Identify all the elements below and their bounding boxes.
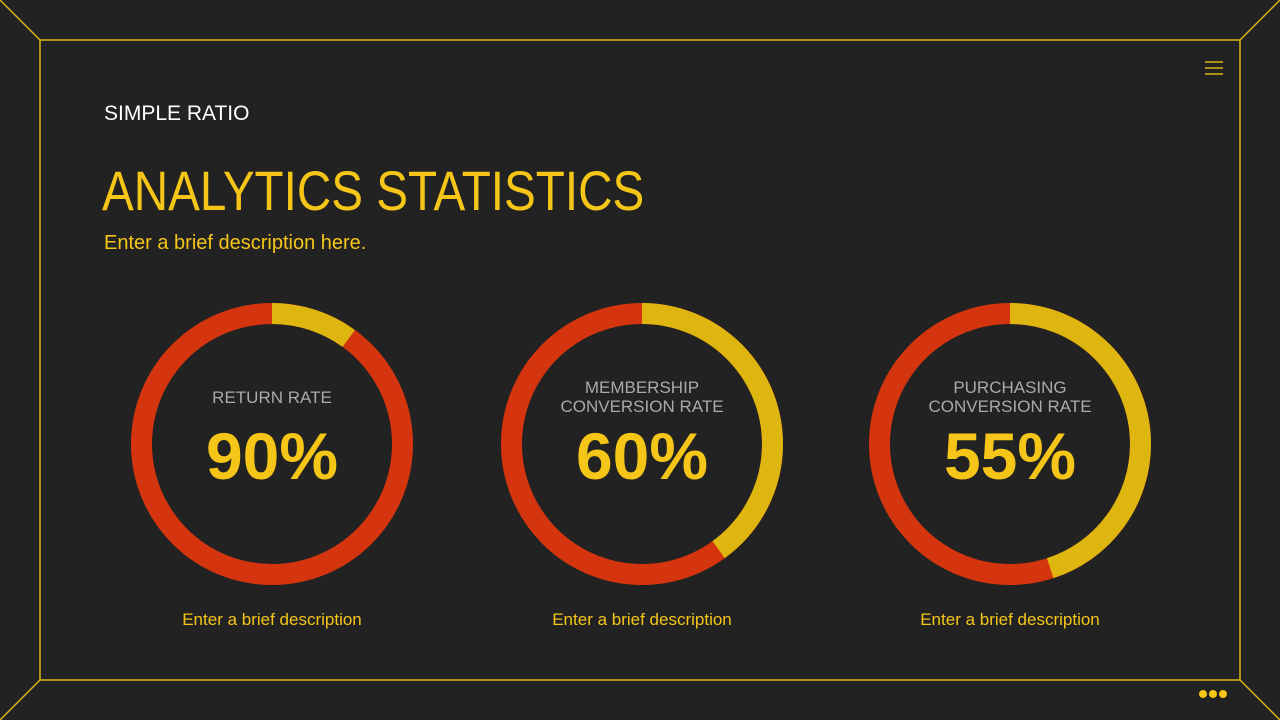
donut: membership: 60% xyxy=(576,419,708,493)
donut: return rate: Enter a brief description xyxy=(182,610,362,629)
donut: membership: CONVERSION RATE xyxy=(560,397,724,416)
donut charts xyxy=(131,303,1151,629)
description: Enter a brief description here. xyxy=(104,232,366,254)
donut: return rate xyxy=(131,303,413,629)
icon: menu xyxy=(1205,61,1223,75)
donut: return rate: 90% xyxy=(206,419,338,493)
donut: purchasing: Enter a brief description xyxy=(920,610,1100,629)
subtitle: SIMPLE RATIO xyxy=(104,102,249,125)
icon: dots xyxy=(1199,690,1227,698)
donut: membership xyxy=(501,303,783,629)
donut: membership: MEMBERSHIP xyxy=(585,378,699,397)
title: ANALYTICS STATISTICS xyxy=(102,159,644,222)
donut: purchasing: PURCHASING xyxy=(953,378,1067,397)
donut: purchasing: CONVERSION RATE xyxy=(928,397,1092,416)
donut: purchasing xyxy=(869,303,1151,629)
donut: return rate: RETURN RATE xyxy=(212,388,332,407)
donut: membership: Enter a brief description xyxy=(552,610,732,629)
donut: purchasing: 55% xyxy=(944,419,1076,493)
